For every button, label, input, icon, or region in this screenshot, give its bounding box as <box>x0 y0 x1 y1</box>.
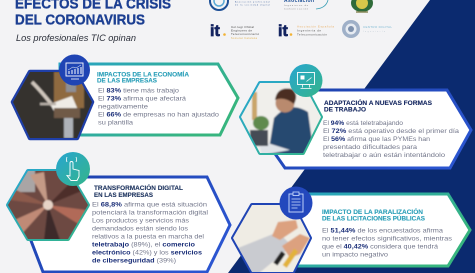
body text: impactos: El 73% afirma que afectará <box>98 96 187 102</box>
panel 2 frame <box>255 90 471 168</box>
icon: touch hand with signal <box>56 152 90 186</box>
body text: transformación: teletrabajo (89%), el comercio <box>92 243 195 249</box>
logo: round seal <box>342 20 360 38</box>
navy diagonal background <box>228 0 475 273</box>
body text: adaptación: presentado dificultades para <box>323 145 418 151</box>
body text: transformación: demandados están siendo los <box>92 227 188 233</box>
heading: adaptación <box>324 99 432 114</box>
body text: impactos: su plantilla <box>98 120 134 126</box>
logo: it colegio <box>210 23 226 40</box>
logo: it asociación: it <box>278 23 288 40</box>
heading: transformación: EN LAS EMPRESAS <box>94 193 153 199</box>
body text: licitaciones: que el 40,42% considera que tendrá <box>322 244 439 250</box>
logo text: ingeniería de telecomunicación: Asociación Española <box>297 24 334 28</box>
photo hexagon: office desk meeting <box>10 70 95 140</box>
logo text: Col·legi Oficial: Enginyers de <box>231 28 252 32</box>
panel: transformación digital <box>5 152 230 272</box>
body text: transformación: de ciberseguridad (39%) <box>92 259 176 265</box>
body text: licitaciones <box>322 228 452 258</box>
photo hexagon: hands with documents <box>230 202 314 273</box>
body text: transformación: El 68,8% afirma que está situación <box>92 203 207 209</box>
panel: impacto de la paralización de las licitaciones <box>230 186 470 273</box>
logo: it asociación <box>278 23 292 40</box>
title <box>15 0 171 28</box>
panel 1 frame <box>60 64 238 135</box>
logo text: top left: de la sociedad digital <box>235 4 270 6</box>
partner logos <box>210 0 392 40</box>
body text: impactos: El 83% tiene más trabajo <box>98 88 180 94</box>
heading: transformación: TRANSFORMACIÓN DIGITAL <box>94 184 183 192</box>
logo text: top left: Asociación profesional <box>235 0 270 4</box>
heading: adaptación: ADAPTACIÓN A NUEVAS FORMAS <box>324 99 432 107</box>
heading: impactos: IMPACTOS DE LA ECONOMÍA <box>97 70 190 78</box>
logo text: ingeniería de telecomunicación <box>297 24 334 36</box>
heading: impactos <box>97 70 190 84</box>
body text: transformación: relativos a la puesta en marcha del <box>92 235 204 241</box>
logo: teal association <box>284 0 328 10</box>
logo text: Col·legi Oficial: Telecomunicació <box>231 32 259 36</box>
body text: impactos: negativamente <box>98 104 149 110</box>
heading: impactos: DE LAS EMPRESAS <box>97 78 157 84</box>
logo text: Col·legi Oficial <box>231 25 259 40</box>
body text: transformación: potenciará la transformación digital <box>92 211 208 217</box>
logo text: seal <box>363 25 392 33</box>
heading: licitaciones: DE LAS LICITACIONES PÚBLICAS <box>322 216 425 223</box>
body text: adaptación: El 72% está operativo desde el primer día <box>323 129 460 135</box>
logo text: ingeniería de telecomunicación: Ingeniería de <box>297 28 321 32</box>
logo text: Col·legi Oficial: Societat Catalana <box>231 37 258 40</box>
logo text: ingeniería de telecomunicación: Telecomunicación <box>297 32 327 36</box>
body text: transformación: Los productos y servicios más <box>92 219 189 225</box>
icon: clipboard <box>280 186 312 220</box>
body text: transformación: electrónico (42%) y los servicios <box>92 251 203 257</box>
body text: licitaciones: El 51,44% de los encuestados afirma <box>322 228 444 234</box>
logo: teal association: Ingenieros de <box>284 4 309 7</box>
logo: teal association: Comunicación <box>284 8 309 10</box>
logo: shield emblem <box>351 0 373 12</box>
panel 4 frame <box>292 194 470 266</box>
panel: impactos de la economía <box>10 54 238 140</box>
body text: adaptación <box>323 121 460 159</box>
title: DEL CORONAVIRUS <box>15 12 145 28</box>
logo text: seal: Ingeniería <box>363 31 386 33</box>
heading: licitaciones <box>322 208 425 223</box>
icon: monitor with video call <box>290 64 322 97</box>
logo: circular emblem <box>210 0 228 10</box>
logo: it colegio: it <box>210 23 220 40</box>
body text: adaptación: El 56% afirma que las PYMEs han <box>323 137 430 143</box>
body text: adaptación: El 94% está teletrabajando <box>323 121 404 127</box>
heading: transformación <box>94 184 183 199</box>
panel 3 frame <box>25 177 230 272</box>
body text: impactos <box>98 88 220 126</box>
icon: chart on monitor <box>59 54 90 86</box>
logo text: Col·legi Oficial: Col·legi Oficial <box>231 25 254 29</box>
panel: adaptación a nuevas formas de trabajo <box>238 64 471 168</box>
logo text: seal: CENTRO DIGITAL <box>363 25 392 29</box>
body text: transformación <box>92 203 208 265</box>
heading: adaptación: DE TRABAJO <box>324 108 366 114</box>
body text: licitaciones: un impacto negativo <box>322 252 389 258</box>
photo hexagon: man working on laptop <box>238 80 324 156</box>
body text: impactos: El 66% de empresas no han ajustado <box>98 112 220 118</box>
logo text: top left <box>235 0 270 6</box>
heading: licitaciones: IMPACTO DE LA PARALIZACIÓN <box>322 208 423 216</box>
photo hexagon: team hands together <box>5 168 90 242</box>
body text: licitaciones: no tener efectos significativos, mientras <box>322 236 452 242</box>
body text: adaptación: teletrabajar o aún están intentándolo <box>323 153 446 159</box>
subtitle: Los profesionales TIC opinan <box>16 33 136 43</box>
